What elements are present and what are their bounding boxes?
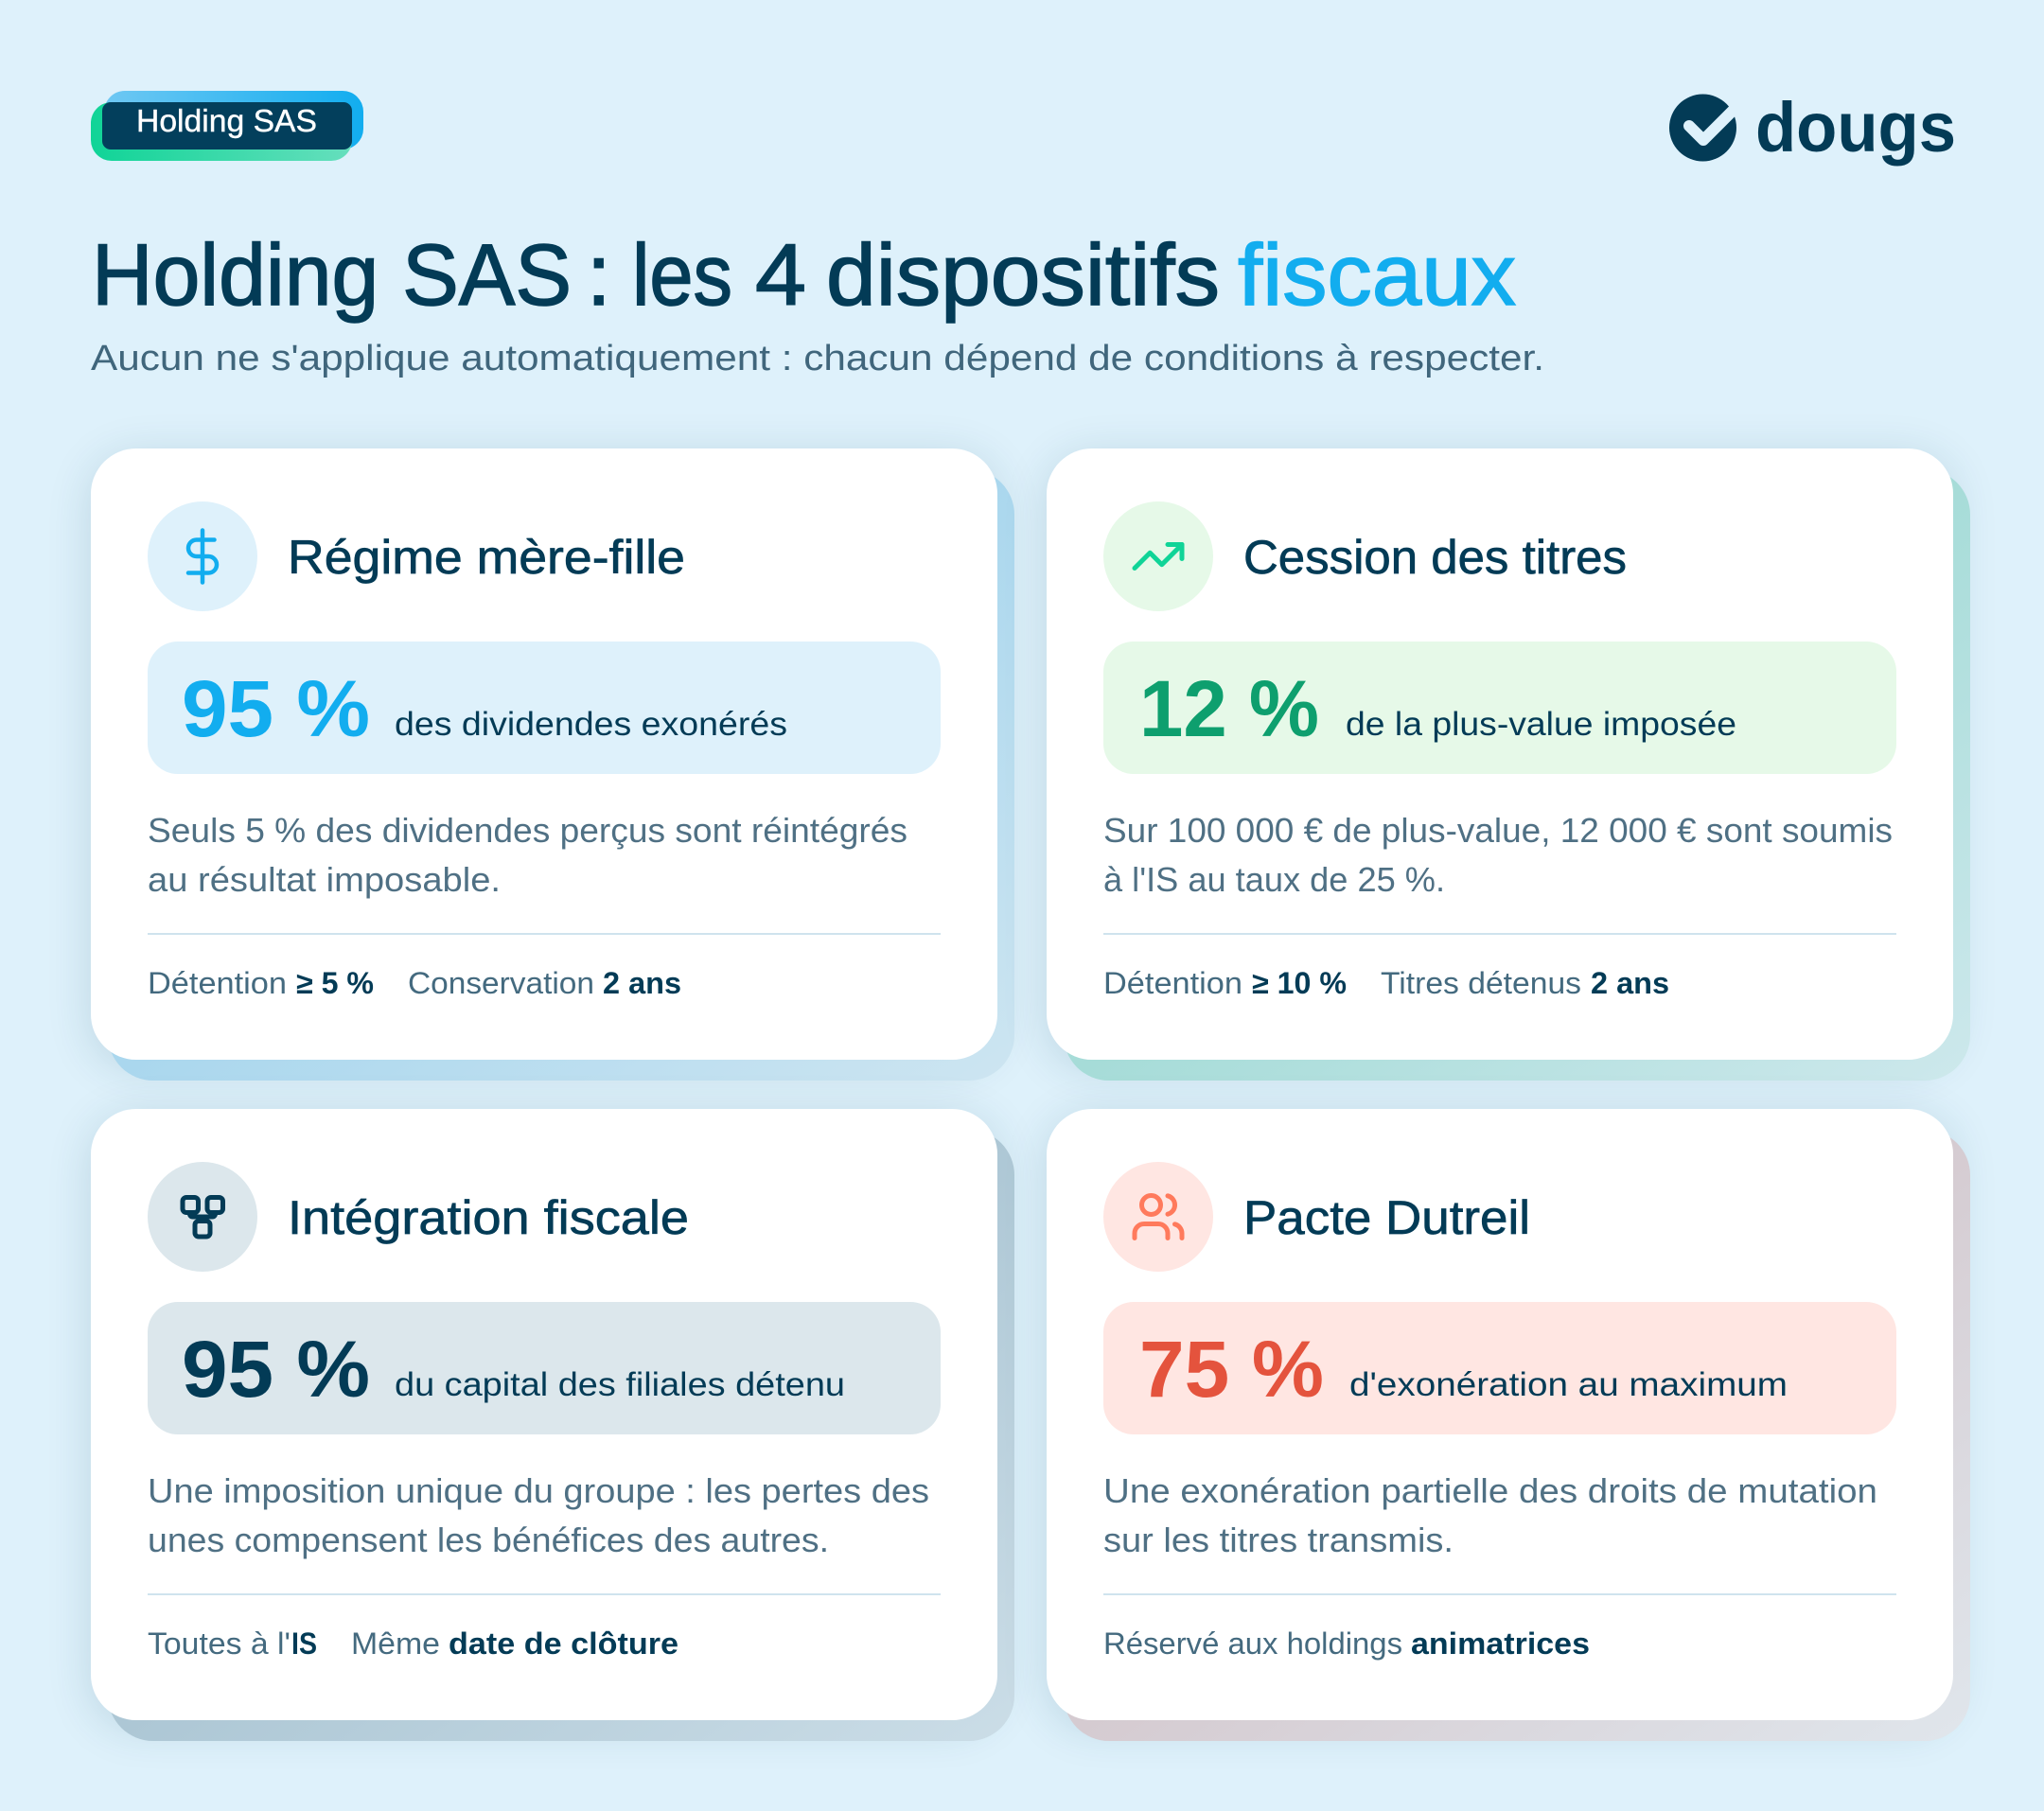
icon: dollar — [148, 501, 257, 611]
title: 4 — [755, 227, 806, 324]
conditions: Conservation — [408, 966, 594, 1000]
panel: Pacte Dutreil — [1047, 1109, 1970, 1741]
title: : — [587, 227, 611, 324]
icon: network — [148, 1162, 257, 1272]
stat: 12 % de la plus-value imposée — [1103, 642, 1896, 774]
description: sur les titres transmis. — [1103, 1521, 1454, 1559]
title: fiscaux — [1238, 227, 1516, 324]
logo: dougs: dougs — [1755, 88, 1956, 167]
conditions — [148, 1626, 678, 1661]
badge: Holding SAS: Holding SAS — [136, 103, 317, 138]
panel: Régime mère-fille — [91, 448, 1014, 1081]
subtitle: Aucun ne s'applique automatiquement : chacun dépend de conditions à respecter. — [91, 339, 1544, 378]
conditions: Toutes à l' — [148, 1626, 291, 1661]
conditions: ≥ 5 % — [296, 966, 374, 1000]
conditions: IS — [291, 1626, 317, 1661]
description: Sur 100 000 € de plus-value, 12 000 € sont soumis — [1103, 811, 1893, 850]
description: Seuls 5 % des dividendes perçus sont réintégrés — [148, 811, 907, 850]
description: unes compensent les bénéfices des autres. — [148, 1521, 829, 1559]
heading: Pacte Dutreil: Pacte Dutreil — [1243, 1191, 1530, 1244]
conditions: ≥ 10 % — [1252, 966, 1347, 1000]
conditions: Détention — [148, 966, 287, 1000]
stat: 12 % de la plus-value imposée: 12 % — [1139, 664, 1319, 753]
conditions: 2 ans — [1591, 966, 1669, 1000]
stat: 75 % d'exonération au maximum: d'exonération au maximum — [1349, 1366, 1788, 1403]
conditions — [148, 966, 681, 1000]
panel: Cession des titres — [1047, 448, 1970, 1081]
icon: trending up — [1103, 501, 1213, 611]
title: Holding SAS — [92, 227, 572, 324]
stat: 75 % d'exonération au maximum: 75 % — [1139, 1325, 1324, 1414]
panel: Intégration fiscale — [91, 1109, 1014, 1741]
stat: 12 % de la plus-value imposée: de la plus-value imposée — [1346, 706, 1736, 743]
stat: 95 % des dividendes exonérés — [148, 642, 941, 774]
badge: Holding SAS — [91, 91, 363, 161]
icon: users — [1103, 1162, 1213, 1272]
stat: 95 % du capital des filiales détenu — [148, 1302, 941, 1434]
stat: 75 % d'exonération au maximum — [1103, 1302, 1896, 1434]
title — [92, 227, 1516, 324]
description — [1103, 1471, 1877, 1559]
logo: dougs — [1669, 88, 1956, 167]
stat: 95 % des dividendes exonérés: 95 % — [182, 664, 370, 753]
stat: 95 % des dividendes exonérés: des dividendes exonérés — [395, 706, 787, 743]
description: au résultat imposable. — [148, 860, 501, 899]
heading: Régime mère-fille: Régime mère-fille — [288, 531, 685, 584]
stat: 95 % du capital des filiales détenu: du capital des filiales détenu — [395, 1366, 845, 1403]
conditions: Détention — [1103, 966, 1242, 1000]
description: à l'IS au taux de 25 %. — [1103, 860, 1445, 899]
description — [148, 811, 907, 899]
conditions: Titres détenus — [1381, 966, 1581, 1000]
description: Une exonération partielle des droits de mutation — [1103, 1471, 1877, 1510]
title: dispositifs — [826, 227, 1220, 324]
conditions — [1103, 1626, 1590, 1661]
conditions — [1103, 966, 1669, 1000]
conditions: 2 ans — [603, 966, 681, 1000]
description — [1103, 811, 1893, 899]
conditions: animatrices — [1411, 1626, 1590, 1661]
conditions: Même — [351, 1626, 440, 1661]
stat: 95 % du capital des filiales détenu: 95 % — [182, 1325, 370, 1414]
heading: Intégration fiscale: Intégration fiscale — [288, 1191, 689, 1244]
conditions: Réservé aux holdings — [1103, 1626, 1402, 1661]
description: Une imposition unique du groupe : les pertes des — [148, 1471, 929, 1510]
description — [148, 1471, 929, 1559]
heading: Cession des titres: Cession des titres — [1243, 531, 1627, 584]
title: les — [632, 227, 732, 324]
conditions: date de clôture — [449, 1626, 678, 1661]
